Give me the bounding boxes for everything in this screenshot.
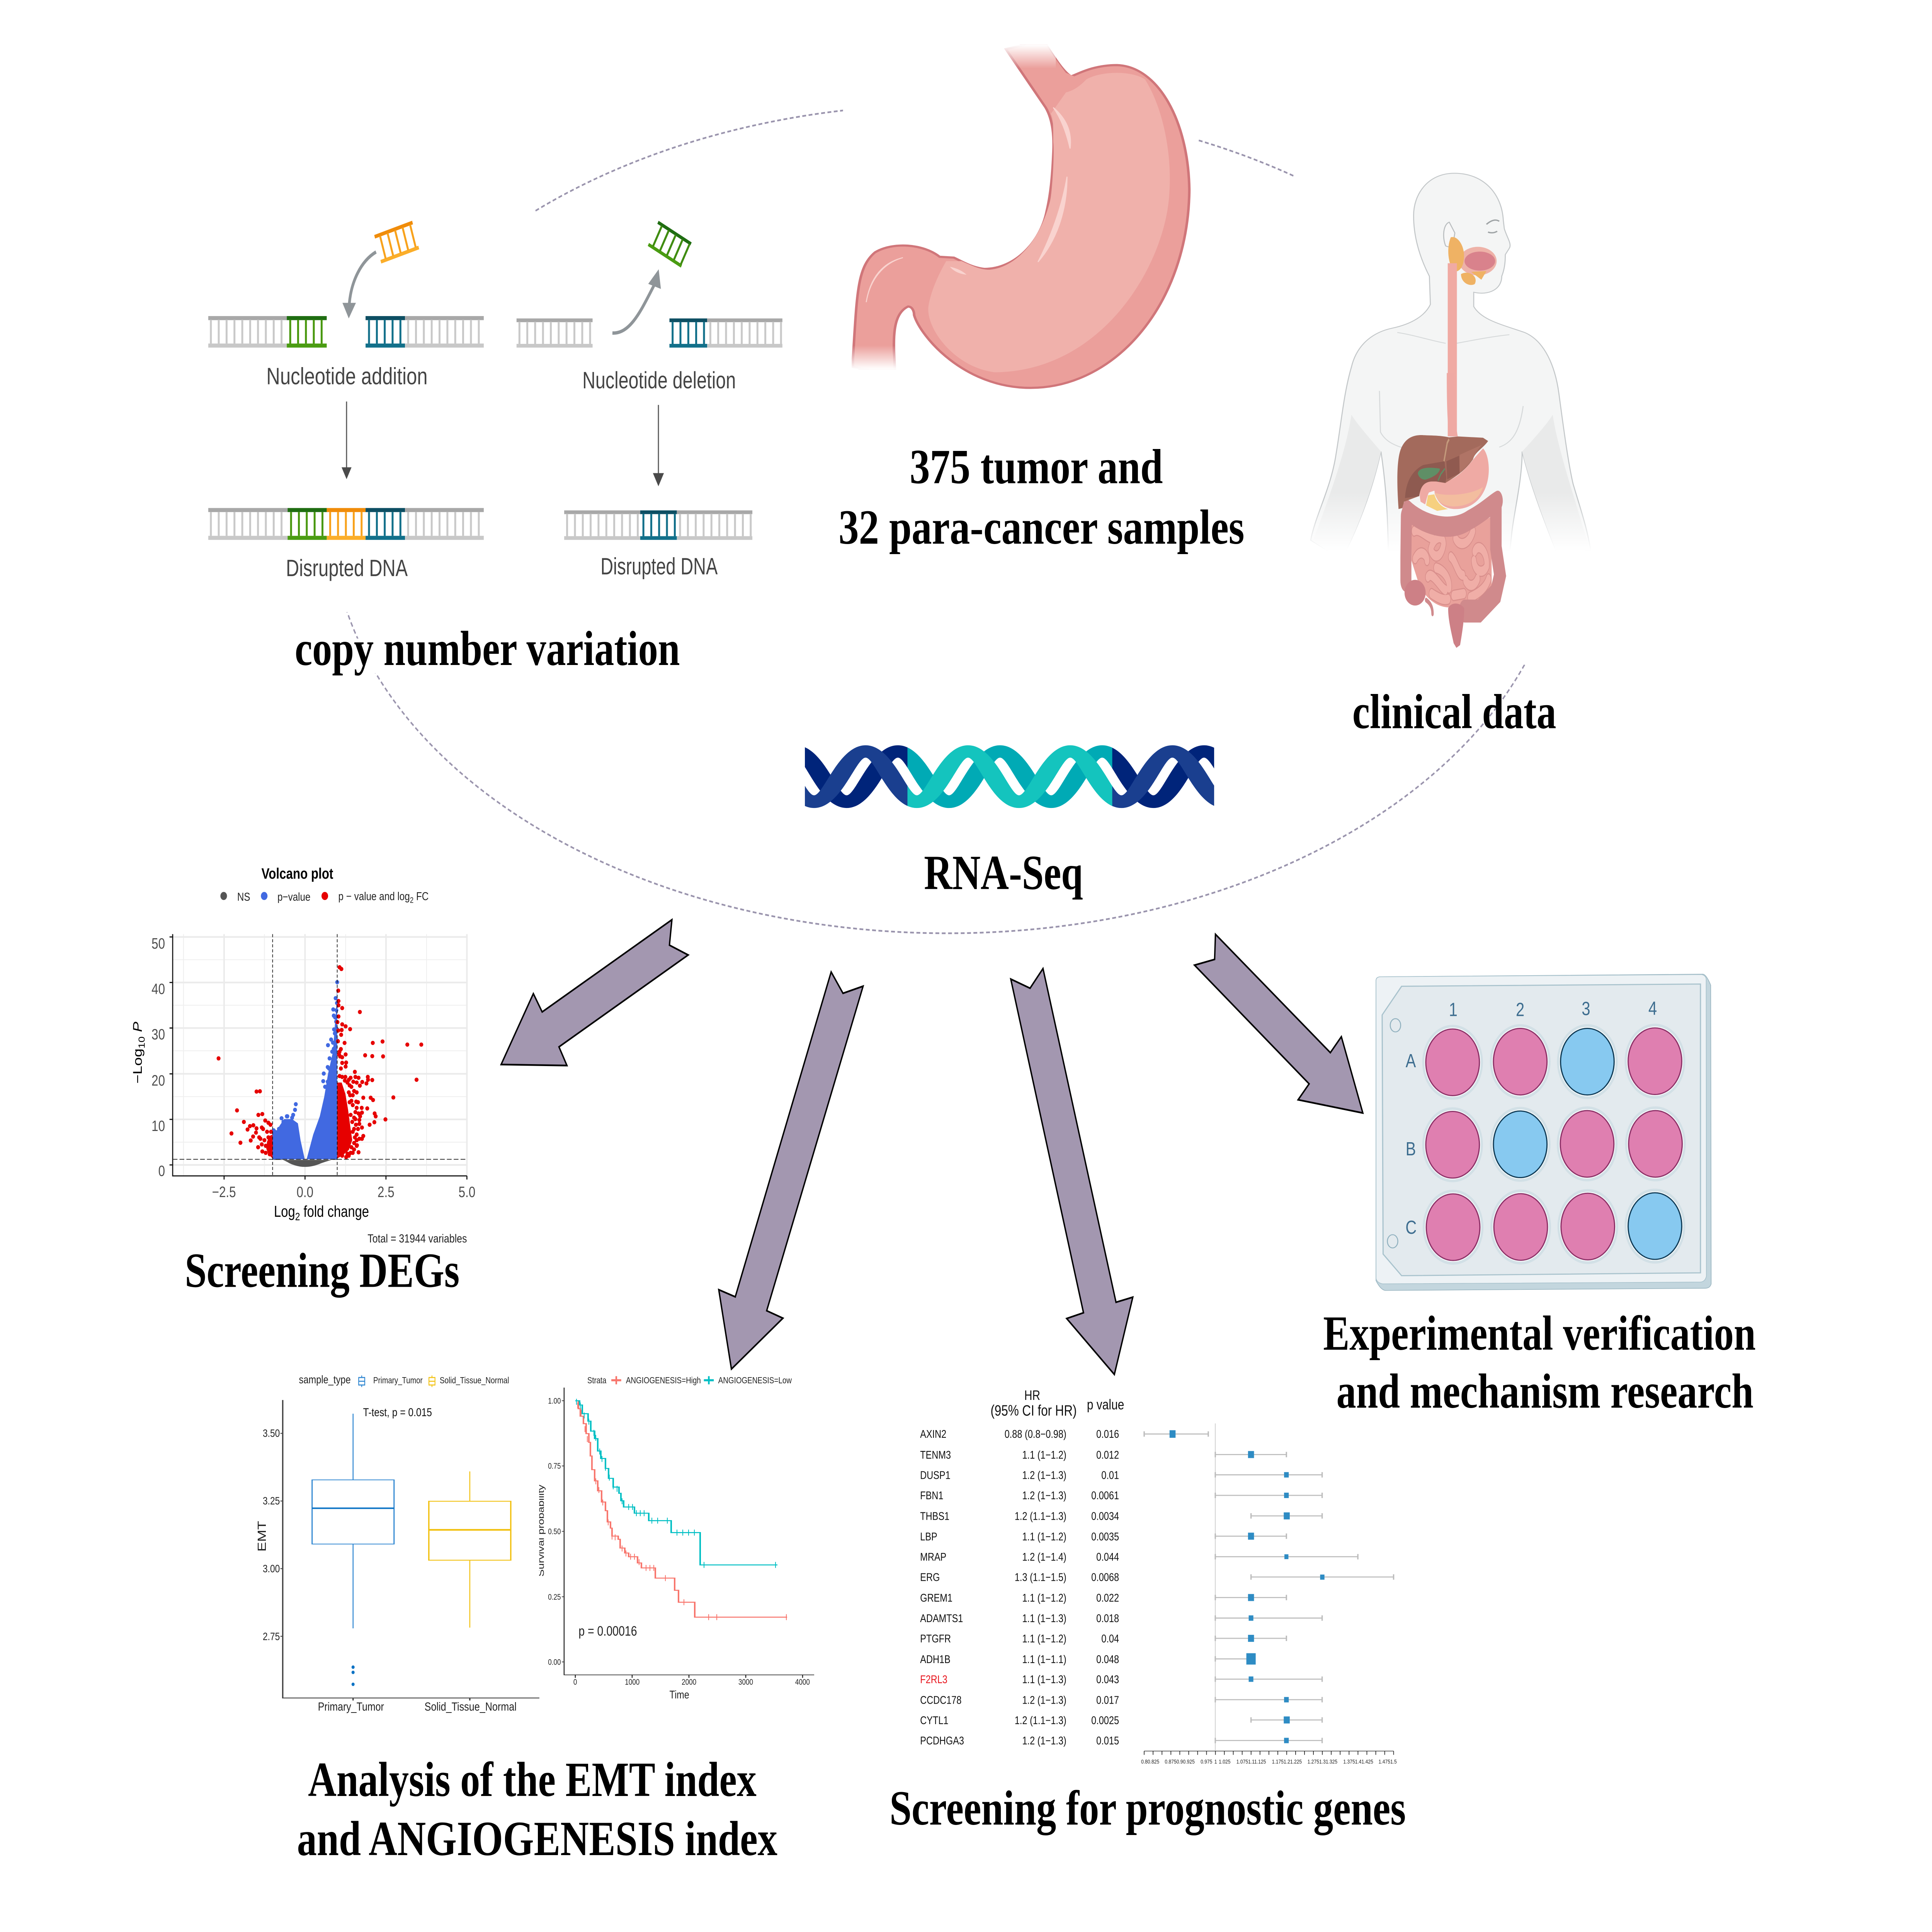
forest gene names: GREM1 — [920, 1592, 952, 1604]
forest p values: 0.04 — [1101, 1632, 1119, 1645]
forest gene names: MRAP — [920, 1551, 946, 1563]
heading: RNA-Seq: RNA-Seq — [924, 846, 1083, 900]
legend: strata: ANGIOGENESIS=Low — [718, 1376, 792, 1385]
boxplot x labels: Solid_Tissue_Normal — [425, 1700, 517, 1713]
panel: volcano plot — [131, 866, 475, 1298]
legend: volcano plot: NS — [237, 890, 250, 903]
x axis tick labels: 5.0 — [459, 1184, 475, 1201]
forest table header: p value — [1087, 1397, 1124, 1413]
survival x title: Time — [669, 1688, 689, 1701]
icon: DNA double helix — [805, 745, 1214, 808]
y axis tick labels — [151, 935, 165, 1179]
survival y ticks: 0.00 — [548, 1658, 561, 1667]
chart: Kaplan-Meier curves — [562, 1388, 814, 1678]
forest p values: 0.01 — [1101, 1469, 1119, 1481]
legend: volcano plot: p − value and log — [338, 889, 410, 903]
legend: strata — [587, 1376, 792, 1385]
boxplot x labels — [318, 1700, 517, 1713]
heading: sample counts line 1: 375 tumor and — [910, 440, 1163, 494]
organ: gallbladder — [1418, 468, 1445, 481]
heading: sample counts line 2: 32 para-cancer samples — [838, 500, 1244, 554]
forest gene names: FBN1 — [920, 1489, 943, 1502]
caption: total variables: Total = 31944 variables — [367, 1232, 467, 1245]
forest hazard ratios — [1005, 1428, 1066, 1747]
DNA strand: nucleotide deletion, left part — [517, 318, 593, 348]
organ: rectum — [1448, 604, 1464, 648]
x axis tick labels: 0.0 — [296, 1184, 313, 1201]
legend: volcano plot: p−value — [277, 890, 310, 903]
plate column labels — [1449, 998, 1657, 1020]
heading: analysis line 1: Analysis of the EMT index — [308, 1753, 757, 1807]
survival y ticks — [548, 1397, 561, 1667]
forest hazard ratios: 1.2 (1−1.4) — [1022, 1551, 1066, 1563]
icon: mouth and salivary glands — [1448, 237, 1497, 436]
forest axis labels: 1.2751.31.325 — [1308, 1759, 1337, 1765]
label: disrupted DNA left: Disrupted DNA — [286, 554, 408, 581]
forest gene names: ADAMTS1 — [920, 1612, 963, 1624]
plate row labels: B — [1406, 1138, 1416, 1160]
heading: screening for prognostic genes: Screening for prognostic genes — [889, 1781, 1406, 1835]
x axis tick labels: −2.5 — [212, 1184, 236, 1201]
forest axis labels: 0.80.825 — [1141, 1759, 1159, 1765]
survival x ticks: 0 — [573, 1678, 577, 1687]
boxplot y ticks: 3.25 — [263, 1495, 280, 1507]
chart title: volcano plot: Volcano plot — [262, 866, 333, 882]
x axis tick labels — [212, 1184, 475, 1201]
forest p values: 0.016 — [1096, 1428, 1119, 1440]
label: nucleotide addition: Nucleotide addition — [266, 362, 428, 389]
heading: experimental verification: Experimental verification — [1323, 1306, 1756, 1361]
DNA strand: nucleotide addition, right part — [366, 316, 484, 348]
forest axis labels: 0.975 — [1201, 1759, 1212, 1765]
heading: screening DEGs: Screening DEGs — [185, 1244, 459, 1298]
heading: clinical data: clinical data — [1352, 685, 1556, 739]
forest gene names — [920, 1428, 964, 1747]
forest gene names: CCDC178 — [920, 1694, 961, 1706]
icon: stomach — [844, 34, 1189, 388]
boxplot y ticks: 2.75 — [263, 1631, 280, 1643]
forest hazard ratios: 1.1 (1−1.2) — [1022, 1592, 1066, 1604]
forest gene names: ERG — [920, 1571, 940, 1583]
icon: orange DNA fragment — [374, 221, 419, 264]
forest axis labels: 1.3751.41.425 — [1343, 1759, 1373, 1765]
panel: clinical data — [1311, 173, 1591, 739]
chart: volcano scatter — [170, 934, 467, 1180]
legend: volcano plot: FC — [413, 889, 429, 903]
forest gene names: PTGFR — [920, 1632, 951, 1645]
forest hazard ratios: 1.2 (1−1.3) — [1022, 1489, 1066, 1502]
survival y ticks: 0.50 — [548, 1527, 561, 1536]
survival x ticks: 2000 — [682, 1678, 696, 1687]
forest hazard ratios: 1.2 (1−1.3) — [1022, 1694, 1066, 1706]
forest gene names: DUSP1 — [920, 1469, 951, 1481]
boxplot x labels: Primary_Tumor — [318, 1700, 384, 1713]
organ: stomach — [1420, 448, 1489, 509]
survival x ticks: 4000 — [795, 1678, 810, 1687]
heading: mechanism research: and mechanism research — [1337, 1364, 1753, 1419]
survival x ticks: 1000 — [625, 1678, 639, 1687]
forest p values: 0.0034 — [1091, 1510, 1119, 1522]
forest axis labels: 1.025 — [1219, 1759, 1230, 1765]
icon: green DNA fragment — [648, 221, 692, 267]
y axis tick labels: 50 — [151, 935, 165, 952]
forest table header: (95% CI for HR) — [991, 1402, 1077, 1419]
forest p values: 0.017 — [1096, 1694, 1119, 1706]
forest gene names: ADH1B — [920, 1653, 951, 1666]
forest axis labels: 0.8750.90.925 — [1165, 1759, 1195, 1765]
forest table header — [991, 1388, 1124, 1419]
organ: liver — [1397, 435, 1488, 509]
forest p values: 0.018 — [1096, 1612, 1119, 1624]
legend: strata: Strata — [587, 1376, 607, 1385]
forest gene names: PCDHGA3 — [920, 1734, 964, 1747]
plate column labels: 3 — [1582, 998, 1590, 1019]
forest hazard ratios: 1.2 (1−1.3) — [1022, 1734, 1066, 1747]
y axis title: 10 — [137, 1036, 147, 1048]
y axis tick labels: 30 — [151, 1026, 165, 1043]
plate row labels: A — [1406, 1050, 1416, 1071]
organ: caecum — [1405, 580, 1426, 605]
x axis title: 2 — [295, 1211, 300, 1223]
forest hazard ratios: 1.2 (1−1.3) — [1022, 1469, 1066, 1481]
legend: sample type: Primary_Tumor — [373, 1376, 423, 1385]
label: nucleotide deletion: Nucleotide deletion — [582, 367, 736, 393]
forest hazard ratios: 1.1 (1−1.1) — [1022, 1653, 1066, 1666]
survival y title, partly cropped: Survival probability — [537, 1485, 546, 1577]
forest hazard ratios: 1.2 (1.1−1.3) — [1015, 1510, 1066, 1522]
y axis tick labels: 0 — [158, 1163, 165, 1179]
DNA strand: nucleotide addition, left part — [208, 316, 327, 348]
plate row labels: C — [1405, 1217, 1417, 1238]
legend: volcano plot — [220, 889, 429, 905]
boxplot y ticks: 3.50 — [263, 1427, 280, 1439]
organ: pancreas — [1426, 487, 1483, 511]
y axis tick labels: 10 — [151, 1118, 165, 1134]
forest axis labels: 1 — [1214, 1759, 1217, 1765]
forest p values: 0.0068 — [1091, 1571, 1119, 1583]
icon: human body silhouette — [1311, 173, 1591, 579]
forest axis labels: 1.0751.11.125 — [1236, 1759, 1266, 1765]
arrow: to experimental verification — [1194, 934, 1363, 1113]
arrow: deletion to disrupted DNA — [653, 405, 664, 486]
boxplot y title: EMT — [255, 1521, 269, 1552]
survival y ticks: 0.25 — [548, 1593, 561, 1602]
forest gene names: THBS1 — [920, 1510, 949, 1522]
arrow: to prognostic gene screening — [1011, 969, 1133, 1374]
panel: EMT index boxplot — [255, 1373, 539, 1713]
forest axis labels — [1141, 1759, 1397, 1765]
forest hazard ratios: 1.2 (1.1−1.3) — [1015, 1714, 1066, 1727]
organ: large intestine — [1406, 501, 1500, 614]
dashed ellipse grouping the data sources — [332, 104, 1564, 933]
y axis title: P — [131, 1022, 145, 1036]
organ: small intestine — [1412, 516, 1492, 607]
chart: boxplot — [281, 1400, 539, 1701]
panel: forest plot — [889, 1388, 1406, 1835]
plate row labels — [1405, 1050, 1417, 1238]
y axis title: −Log — [131, 1048, 145, 1083]
survival x ticks — [573, 1678, 810, 1687]
forest gene names: LBP — [920, 1530, 937, 1543]
forest p values: 0.0035 — [1091, 1530, 1119, 1543]
forest gene names: CYTL1 — [920, 1714, 948, 1727]
forest hazard ratios: 1.3 (1.1−1.5) — [1015, 1571, 1066, 1583]
forest p values: 0.015 — [1096, 1734, 1119, 1747]
forest hazard ratios: 1.1 (1−1.2) — [1022, 1530, 1066, 1543]
x axis title: Log — [274, 1203, 295, 1220]
boxplot y ticks — [263, 1427, 280, 1643]
forest hazard ratios: 1.1 (1−1.2) — [1022, 1632, 1066, 1645]
legend: sample type — [299, 1373, 509, 1387]
panel: experimental verification — [1323, 974, 1756, 1419]
forest axis labels: 1.1751.21.225 — [1272, 1759, 1302, 1765]
forest p values: 0.012 — [1096, 1448, 1119, 1461]
x axis tick labels: 2.5 — [378, 1184, 395, 1201]
forest p values: 0.0061 — [1091, 1489, 1119, 1502]
label: disrupted DNA right: Disrupted DNA — [600, 553, 718, 580]
forest p values: 0.0025 — [1091, 1714, 1119, 1727]
forest hazard ratios: 0.88 (0.8−0.98) — [1005, 1428, 1066, 1440]
arrow: to volcano plot — [501, 920, 688, 1066]
DNA strand: nucleotide deletion, right part — [669, 318, 782, 348]
arrow: deletion curve — [612, 269, 661, 333]
forest table header: HR — [1024, 1388, 1040, 1403]
forest p values: 0.048 — [1096, 1653, 1119, 1666]
panel: RNA-Seq — [805, 745, 1214, 900]
forest p values: 0.022 — [1096, 1592, 1119, 1604]
legend: strata: ANGIOGENESIS=High — [626, 1376, 701, 1385]
chart: forest intervals — [1144, 1423, 1394, 1753]
forest gene names: AXIN2 — [920, 1428, 946, 1440]
heading: analysis line 2: and ANGIOGENESIS index — [297, 1812, 777, 1866]
heading: copy number variation: copy number variation — [295, 622, 680, 676]
survival x ticks: 3000 — [738, 1678, 753, 1687]
legend: volcano plot: 2 — [410, 896, 413, 905]
forest hazard ratios: 1.1 (1−1.3) — [1022, 1673, 1066, 1685]
plate column labels: 4 — [1648, 998, 1657, 1019]
icon: 12-well plate — [1376, 974, 1711, 1291]
y axis tick labels: 40 — [151, 981, 165, 997]
arrow: to EMT and angiogenesis analysis — [719, 972, 863, 1369]
panel: angiogenesis survival curve — [537, 1376, 814, 1701]
plate column labels: 2 — [1516, 999, 1524, 1020]
forest p values: 0.043 — [1096, 1673, 1119, 1685]
annotation: log-rank p value: p = 0.00016 — [578, 1623, 637, 1639]
forest axis labels: 1.4751.5 — [1379, 1759, 1397, 1765]
forest p values — [1091, 1428, 1119, 1747]
plate column labels: 1 — [1449, 999, 1458, 1020]
forest hazard ratios: 1.1 (1−1.2) — [1022, 1448, 1066, 1461]
x axis title: fold change — [300, 1203, 369, 1220]
DNA strand: disrupted DNA with insertion — [208, 508, 484, 540]
boxplot y ticks: 3.00 — [263, 1563, 280, 1575]
arrow: addition to disrupted DNA — [342, 401, 352, 479]
organ: esophagus — [1447, 373, 1458, 437]
y axis tick labels: 20 — [151, 1072, 165, 1089]
forest gene names: TENM3 — [920, 1448, 951, 1461]
legend: sample type: sample_type — [299, 1373, 351, 1386]
panel: tumor samples — [838, 34, 1244, 554]
icon: digestive organs — [1397, 373, 1500, 648]
legend: sample type: Solid_Tissue_Normal — [440, 1376, 509, 1385]
forest p values: 0.044 — [1096, 1551, 1119, 1563]
panel: copy number variation — [208, 221, 782, 676]
annotation: t-test: T-test, p = 0.015 — [363, 1406, 432, 1419]
survival y ticks: 0.75 — [548, 1462, 561, 1471]
forest hazard ratios: 1.1 (1−1.3) — [1022, 1612, 1066, 1624]
DNA strand: disrupted DNA after deletion — [564, 510, 752, 540]
forest gene names: F2RL3 — [920, 1673, 947, 1685]
survival y ticks: 1.00 — [548, 1397, 561, 1406]
arrow: insertion curve — [342, 252, 376, 318]
